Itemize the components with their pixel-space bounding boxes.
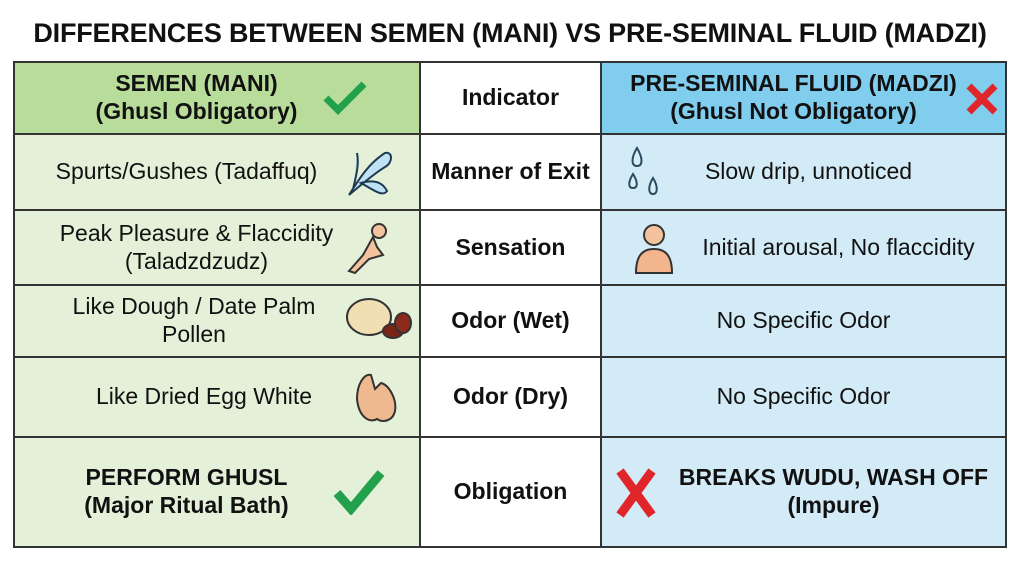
icon: check	[334, 470, 384, 515]
row 2: Peak Pleasure & Flaccidity	[60, 220, 333, 246]
table: Odor (Dry)	[453, 383, 568, 409]
row 4: Like Dried Egg White	[96, 383, 312, 409]
icon: eggshell	[356, 374, 396, 422]
header: semen: (Ghusl Obligatory)	[96, 98, 297, 124]
header: semen	[13, 61, 420, 133]
title: DIFFERENCES BETWEEN SEMEN (MANI) VS PRE-SEMINAL FLUID (MADZI)	[33, 18, 987, 48]
row 1: Spurts/Gushes (Tadaffuq)	[56, 158, 317, 184]
icon: person	[635, 224, 673, 274]
row 5: (Major Ritual Bath)	[84, 492, 289, 518]
table: Initial arousal, No flaccidity	[702, 234, 975, 260]
table: Obligation	[454, 478, 567, 504]
table: Odor (Wet)	[451, 307, 570, 333]
icon: splash	[348, 152, 392, 196]
header: madzi: (Ghusl Not Obligatory)	[670, 98, 917, 124]
header: madzi	[601, 61, 1006, 133]
icon: cross	[616, 468, 656, 518]
table: No Specific Odor	[717, 307, 890, 333]
icon: cross header	[966, 84, 998, 114]
icon: reclining person	[347, 223, 387, 274]
header: madzi: PRE-SEMINAL FLUID (MADZI)	[630, 70, 957, 96]
table: (Impure)	[788, 492, 880, 518]
row 5: PERFORM GHUSL	[86, 464, 287, 490]
table: Sensation	[456, 234, 565, 260]
row 1	[13, 133, 420, 209]
table: No Specific Odor	[717, 383, 890, 409]
table: BREAKS WUDU, WASH OFF	[679, 464, 988, 490]
row 2	[13, 209, 420, 284]
table: Manner of Exit	[431, 158, 590, 184]
icon: drops	[628, 146, 658, 195]
row 3: Like Dough / Date Palm	[73, 293, 315, 319]
icon: dough and dates	[346, 298, 412, 339]
table: Slow drip, unnoticed	[705, 158, 912, 184]
row 3: Pollen	[162, 321, 226, 347]
row 5	[13, 436, 420, 546]
row 3	[13, 284, 420, 356]
header: indicator	[420, 61, 601, 133]
header: semen: SEMEN (MANI)	[115, 70, 278, 96]
header: indicator: Indicator	[462, 84, 559, 110]
row 4	[13, 356, 420, 436]
row 2: (Taladzdzudz)	[125, 248, 268, 274]
icon: check header	[324, 82, 366, 115]
